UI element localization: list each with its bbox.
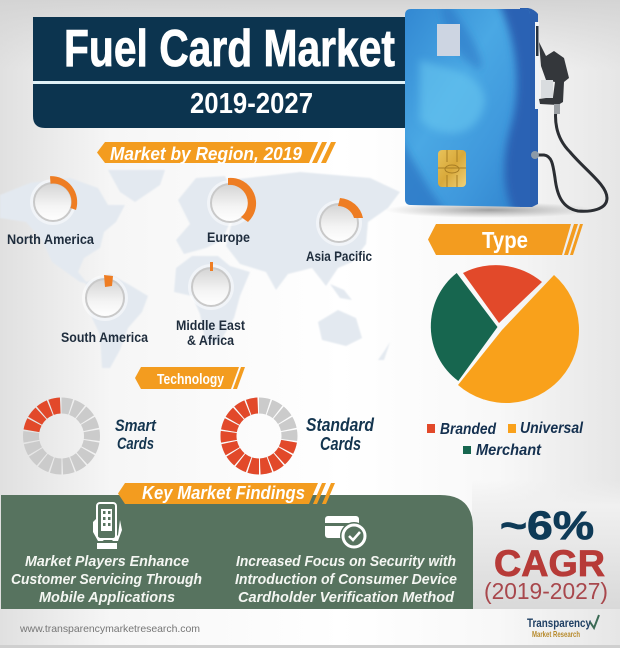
title banner [33,17,410,128]
finding text: security: Increased Focus on Security with [236,553,456,570]
banner: technology: Technology [157,371,225,388]
banner: type [428,224,583,255]
CAGR callout: (2019-2027) [484,578,608,604]
card face [405,9,530,207]
logo: Market Research [532,629,580,639]
label: Europe [207,229,250,245]
nozzle [539,42,569,105]
donut: smart cards [26,401,97,471]
pie chart: type [431,265,579,403]
world map [0,170,400,368]
CAGR background [472,480,620,609]
label: smart cards: Cards [117,434,154,453]
hologram [437,24,460,56]
finding text: mobile: Mobile Applications [39,589,175,606]
pump hose [536,108,607,211]
banner: market by region: Market by Region, 2019 [110,144,302,164]
CAGR callout: CAGR [494,543,605,584]
label: Asia Pacific [306,248,372,264]
pie legend: Universal [520,420,584,437]
banner: type: Type [482,227,528,253]
label: standard cards: Cards [320,434,361,454]
icon: mobile phone in hand [93,503,122,549]
donut: South America [61,275,148,345]
donut: standard cards [224,401,294,471]
pie legend: Merchant [476,442,542,459]
chip [438,150,466,187]
finding text: mobile: Market Players Enhance [25,553,189,570]
subtitle years: 2019-2027 [190,88,313,120]
label: Middle East [176,317,245,333]
label: smart cards: Smart [115,416,157,435]
CAGR callout: ~6% [500,504,594,548]
label: standard cards: Standard [306,415,375,435]
logo [527,615,599,639]
label: North America [7,231,94,247]
pie legend: Branded [440,421,496,438]
label: & Africa [187,332,234,348]
finding text: security: Introduction of Consumer Device [235,571,457,588]
panel: key market findings [1,495,473,609]
donut: Middle East and Africa [176,262,245,348]
bottom strip [0,645,620,648]
fuel pump card illustration [385,0,607,218]
pump side [520,8,538,207]
footer url: www.transparencymarketresearch.com [19,623,200,635]
banner: technology [135,367,245,389]
pie legend [427,420,584,459]
logo: Transparency [527,616,591,630]
donut: Asia Pacific [306,198,372,264]
banner: key market findings: Key Market Findings [142,483,305,503]
icon: card with check [325,516,368,550]
title: Fuel Card Market [64,20,395,78]
label: South America [61,329,148,345]
finding text: security: Cardholder Verification Method [238,589,455,606]
donut: North America [7,176,94,247]
finding text: mobile: Customer Servicing Through [11,571,202,588]
CAGR callout [484,504,608,604]
donut: Europe [207,178,256,245]
